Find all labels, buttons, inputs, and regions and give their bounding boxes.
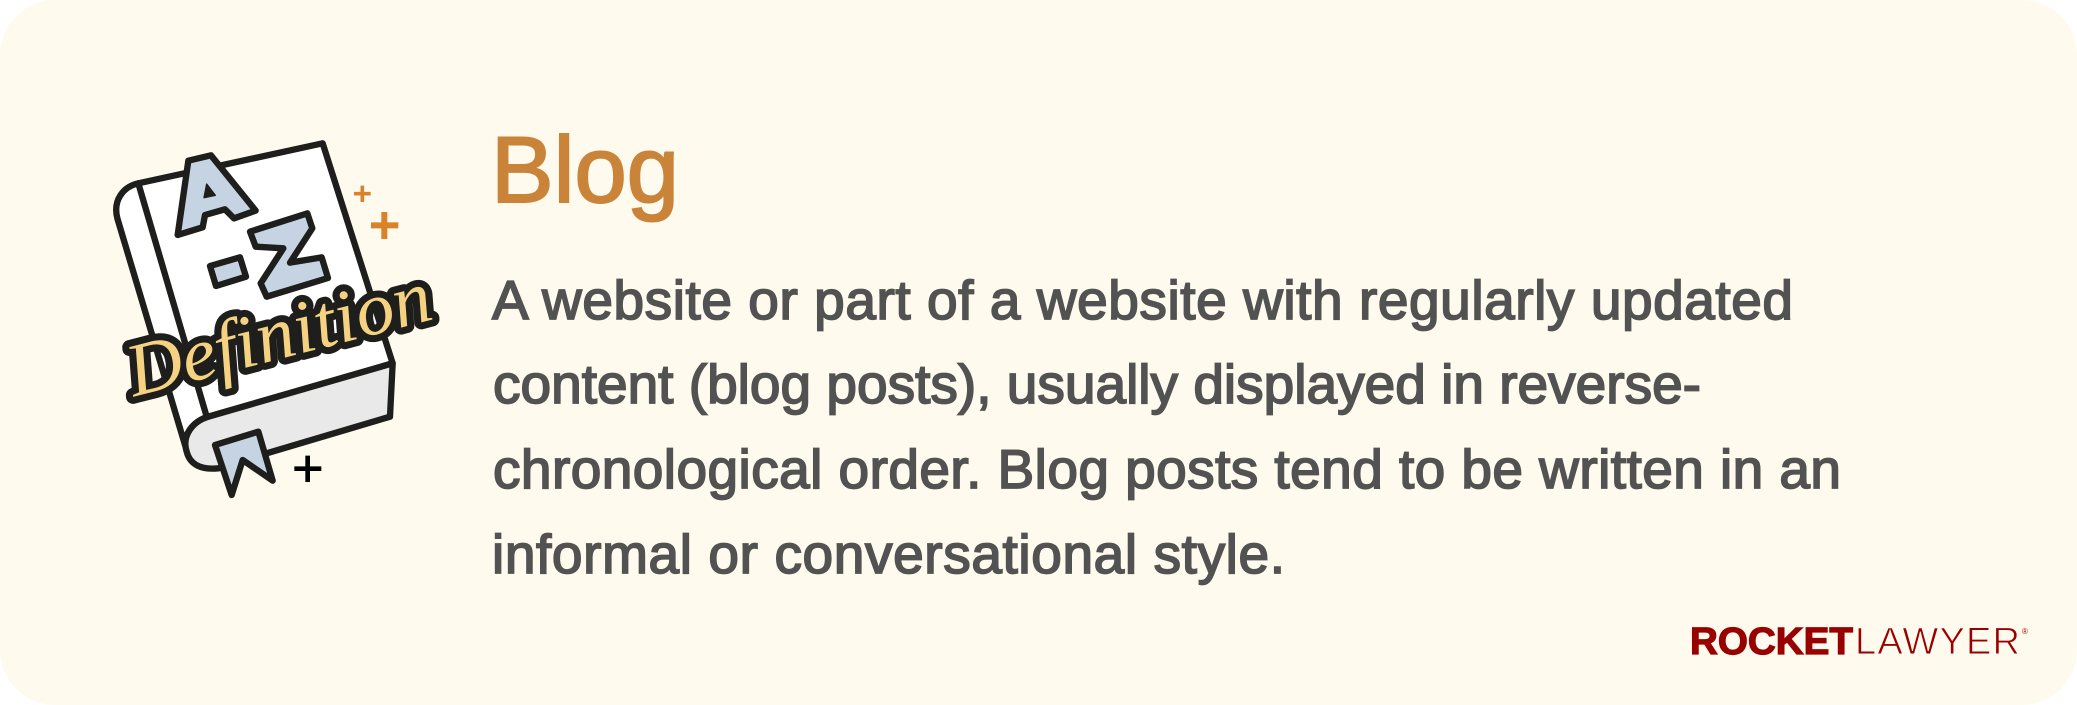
book pages bbox=[185, 363, 393, 469]
logo: Rocket Lawyer: ® bbox=[2022, 627, 2028, 636]
definition text: content (blog posts), usually displayed in reverse- bbox=[493, 353, 1701, 415]
letter A counter bbox=[204, 184, 215, 198]
logo: Rocket Lawyer: ROCKET bbox=[1690, 621, 1853, 663]
logo: Rocket Lawyer bbox=[1690, 621, 2028, 663]
black plus bbox=[294, 456, 321, 482]
book spine line bbox=[138, 183, 207, 417]
letter A bbox=[178, 155, 256, 235]
definition text: A website or part of a website with regularly updated bbox=[492, 269, 1793, 331]
logo: Rocket Lawyer: LAWYER bbox=[1855, 621, 2020, 663]
icon: definition book bbox=[116, 143, 440, 495]
definition text: chronological order. Blog posts tend to be written in an bbox=[493, 438, 1841, 500]
small orange plus bbox=[354, 186, 371, 202]
definition text bbox=[492, 269, 1841, 585]
letter Z bbox=[250, 213, 328, 297]
title: Blog bbox=[491, 117, 679, 222]
hyphen bbox=[210, 257, 246, 286]
large orange plus bbox=[371, 212, 398, 239]
definition text: informal or conversational style. bbox=[492, 523, 1285, 585]
script word: Definition: Definition bbox=[116, 255, 440, 413]
bookmark bbox=[215, 432, 273, 495]
book cover bbox=[116, 143, 393, 445]
